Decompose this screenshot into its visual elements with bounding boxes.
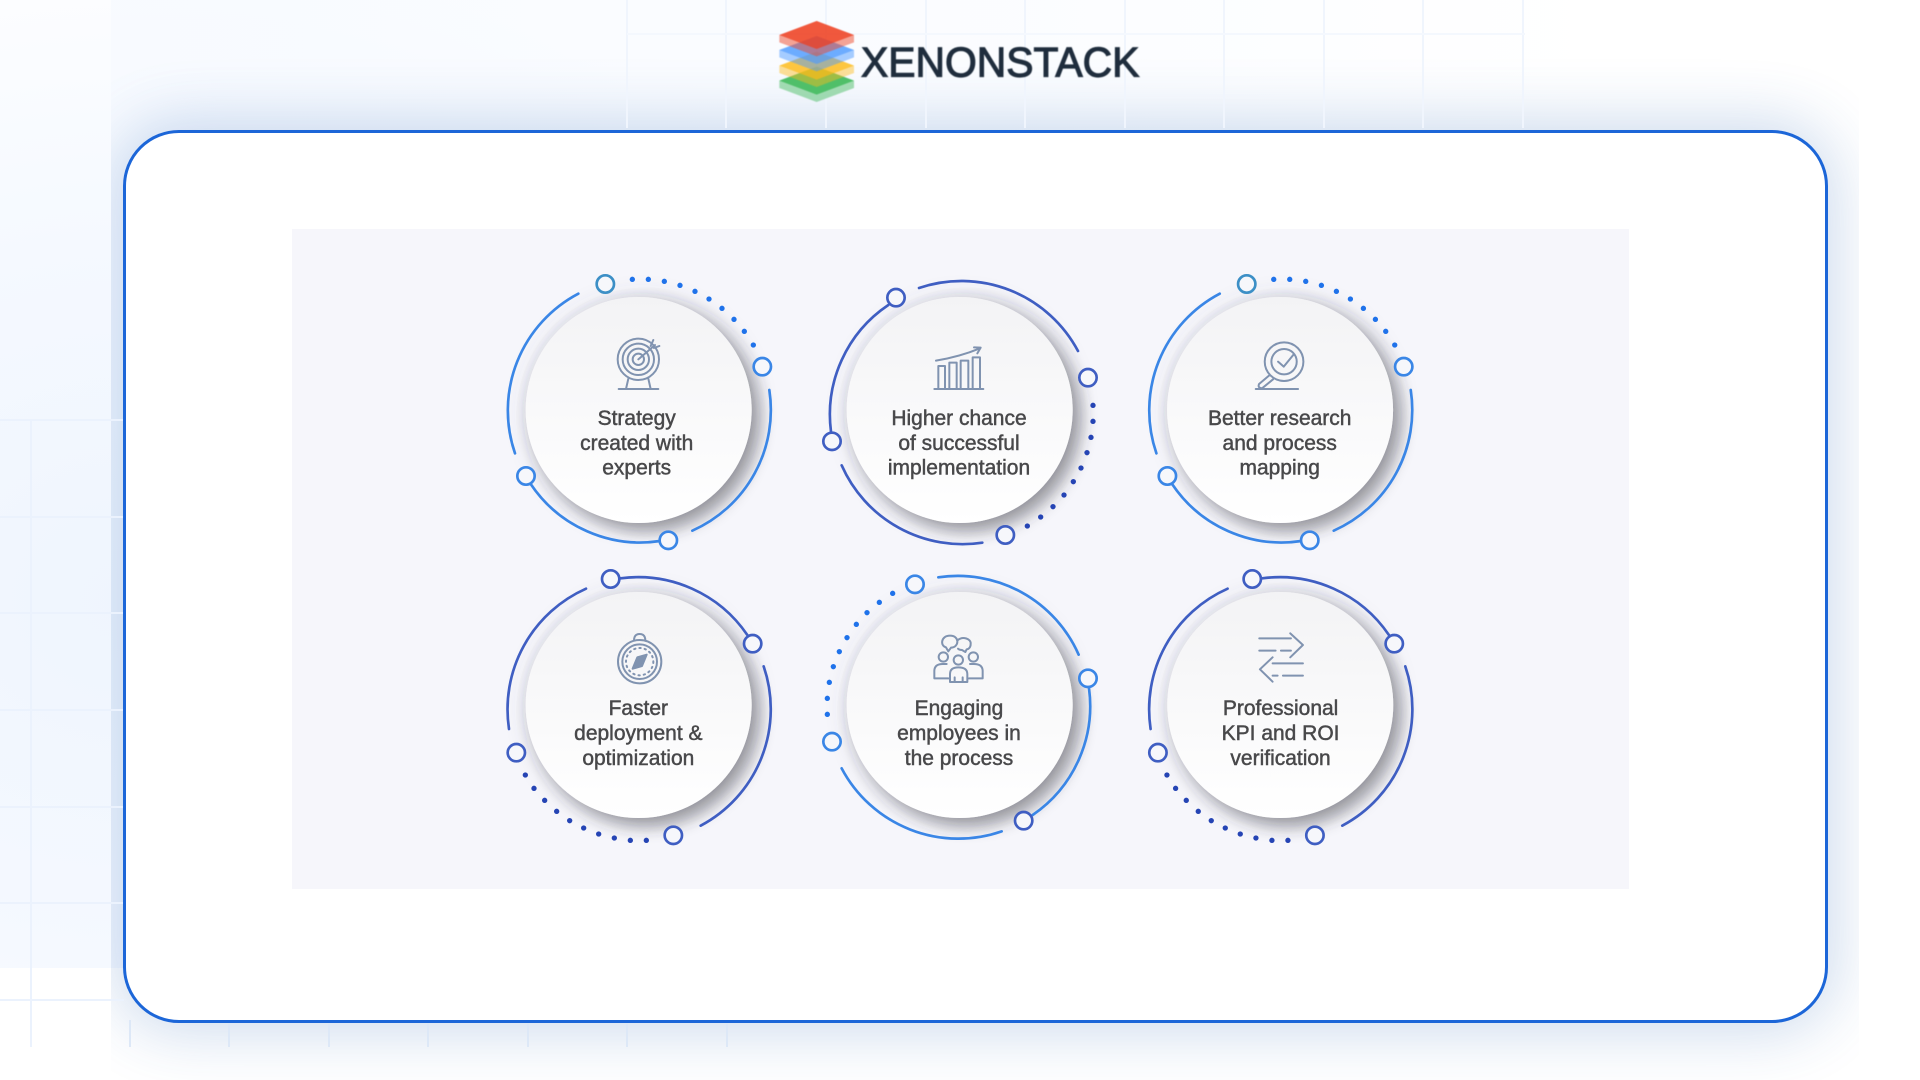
label: and process: [1223, 432, 1337, 455]
card: Professional KPI and ROI verification: [1149, 570, 1412, 844]
icon: exchange arrows: [1259, 633, 1303, 682]
label: implementation: [888, 456, 1030, 479]
label: Engaging: [915, 697, 1003, 720]
logo wordmark: XENONSTACK: [861, 39, 1139, 86]
label: employees in: [897, 722, 1021, 745]
main panel: [123, 130, 1828, 1022]
label: deployment &: [574, 722, 702, 745]
label: Better research: [1208, 407, 1351, 430]
label: experts: [602, 456, 671, 479]
card: Engaging employees in the process: [823, 576, 1097, 839]
label: KPI and ROI: [1222, 722, 1340, 745]
logo icon: stacked layers: [779, 21, 854, 102]
card: Better research and process mapping: [1149, 275, 1412, 549]
label: Faster: [609, 697, 668, 720]
label: verification: [1230, 747, 1331, 770]
icon: target: [618, 339, 659, 389]
top background tint: [111, 0, 1611, 130]
label: of successful: [898, 432, 1020, 455]
inner infographic panel: [292, 229, 1628, 889]
icon: bar chart: [934, 347, 983, 389]
label: optimization: [582, 747, 694, 770]
card: Faster deployment and optimization: [508, 570, 771, 844]
label: Higher chance: [891, 407, 1027, 430]
card: Strategy created with experts: [508, 275, 771, 549]
label: mapping: [1239, 456, 1320, 479]
logo: [778, 20, 1140, 102]
label: Professional: [1223, 697, 1338, 720]
icon: magnifier with check: [1256, 342, 1303, 389]
icon: people talking: [934, 636, 983, 682]
label: Strategy: [598, 407, 676, 430]
card: Higher chance of successful implementation: [823, 281, 1097, 544]
label: the process: [905, 747, 1013, 770]
label: created with: [580, 432, 693, 455]
icon: compass: [618, 634, 661, 683]
